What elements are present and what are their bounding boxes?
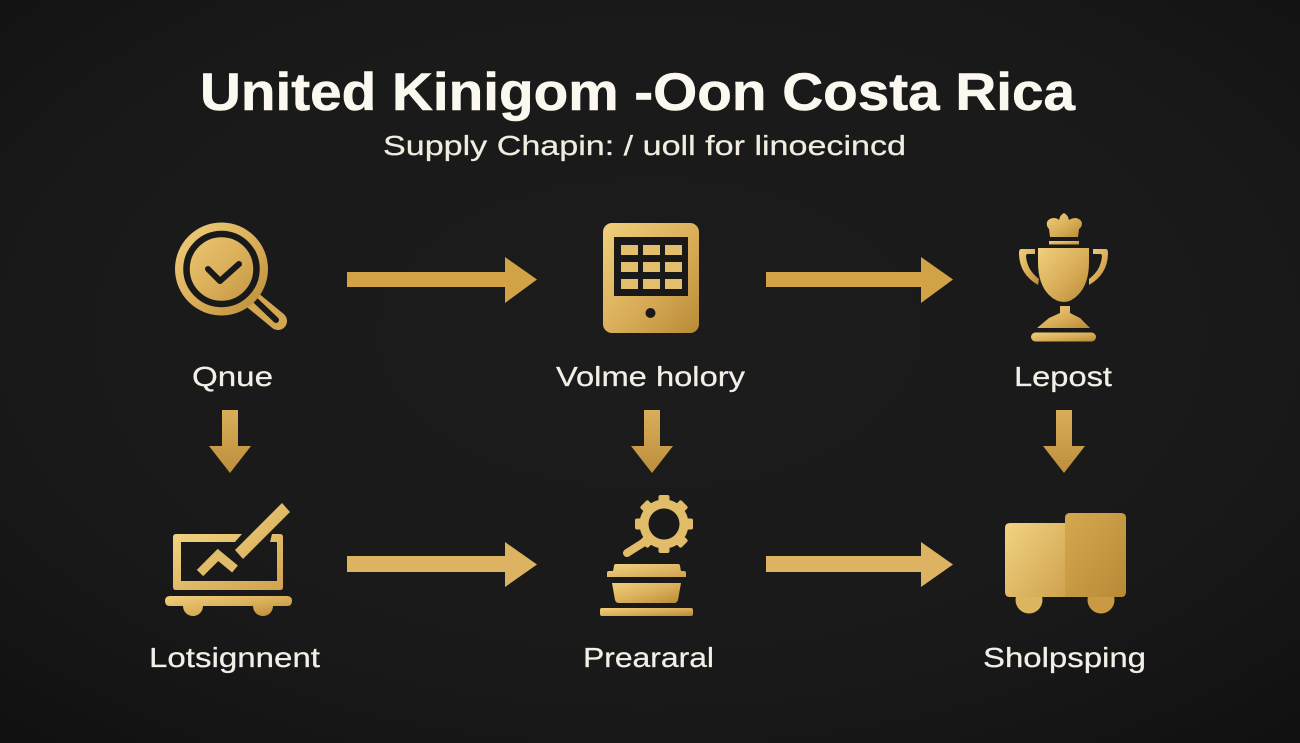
icon: trophy xyxy=(1019,213,1108,342)
label: Volme holory: Volme holory xyxy=(556,361,745,392)
arrow: top row middle to right xyxy=(766,257,953,303)
icon: tablet with grid xyxy=(603,223,699,333)
icon: cart with chart and pen xyxy=(165,503,292,616)
label: Qnue: Qnue xyxy=(192,361,273,392)
icon: magnifier with check xyxy=(175,222,278,321)
title: United Kinigom -Oon Costa Rica xyxy=(200,63,1076,122)
arrow: down left xyxy=(209,410,251,473)
label: Preararal: Preararal xyxy=(583,642,714,673)
arrow: down right xyxy=(1043,410,1085,473)
arrow: bottom row middle to right xyxy=(766,542,953,587)
arrow: down middle xyxy=(631,410,673,473)
arrow: top row left to middle xyxy=(347,257,537,303)
icon: delivery truck xyxy=(1005,513,1126,614)
icon: gear with bowl xyxy=(600,495,693,616)
label: Lepost: Lepost xyxy=(1014,361,1112,392)
label: Lotsignnent: Lotsignnent xyxy=(149,642,320,673)
label: Sholpsping: Sholpsping xyxy=(983,642,1146,673)
subtitle: Supply Chapin: / uoll for linoecincd xyxy=(383,130,906,161)
arrow: bottom row left to middle xyxy=(347,542,537,587)
